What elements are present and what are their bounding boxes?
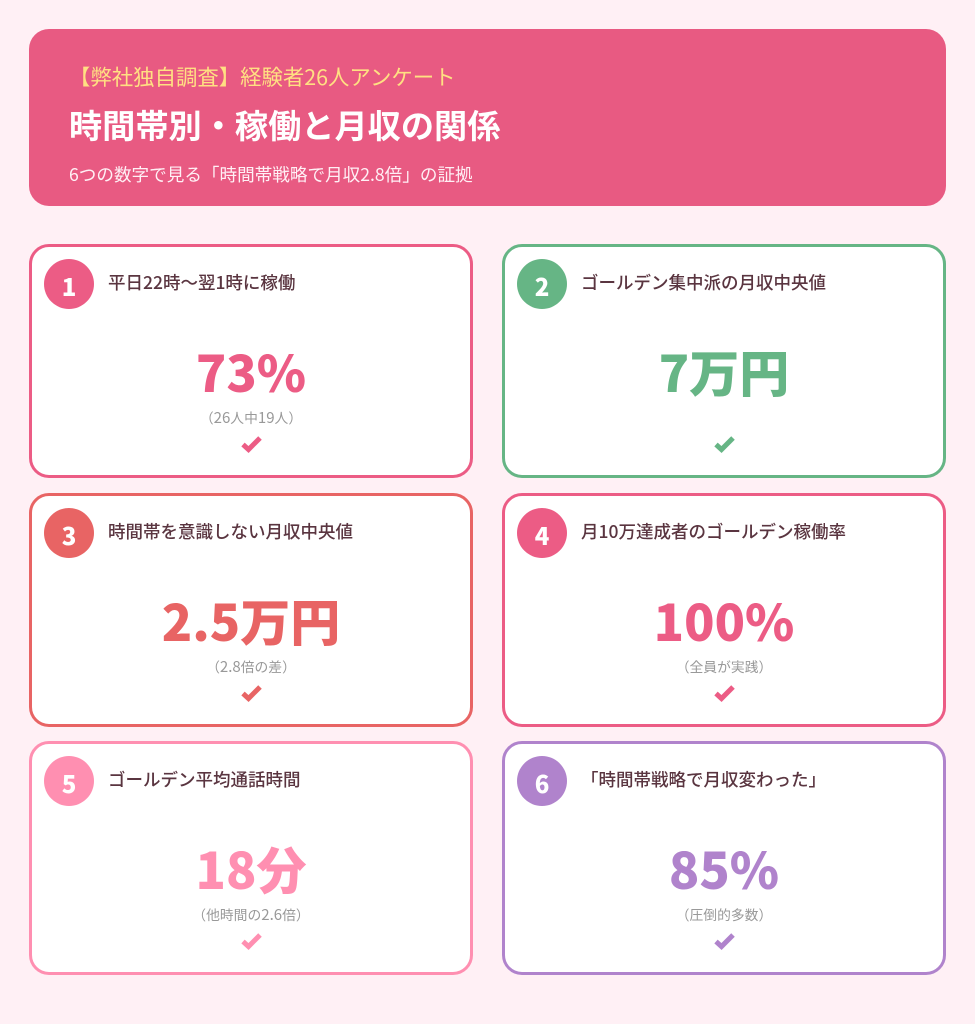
card 1 note: （26人中19人） [200,407,302,428]
card 2 value: 7万円 [659,335,789,407]
card 4 heading: 月10万達成者のゴールデン稼働率 [581,519,846,544]
main title: 時間帯別・稼働と月収の関係 [69,99,500,148]
icon: check 4 [714,685,735,702]
number badge 1 [44,259,94,309]
icon: check 6 [714,933,735,950]
panel: card 2 [502,244,946,478]
number badge 4 [517,508,567,558]
card 6 note: （圧倒的多数） [676,904,772,924]
icon: check 5 [241,933,262,950]
card 4 note: （全員が実践） [676,656,772,676]
number badge 2 [517,259,567,309]
number badge 4: 4 [535,517,549,552]
panel: card 3 [29,493,473,727]
panel: card 6 [502,741,946,975]
card 3 note: （2.8倍の差） [206,656,296,677]
card 5 heading: ゴールデン平均通話時間 [108,767,300,792]
card 5 note: （他時間の2.6倍） [192,904,310,925]
number badge 2: 2 [535,268,549,303]
card 4 value: 100% [654,584,794,656]
header subtitle: 6つの数字で見る「時間帯戦略で月収2.8倍」の証拠 [69,162,473,187]
number badge 5: 5 [62,765,76,800]
card 6 value: 85% [669,832,779,904]
card 6 heading: 「時間帯戦略で月収変わった」 [581,767,826,792]
card 3 heading: 時間帯を意識しない月収中央値 [108,519,353,544]
card 2 heading: ゴールデン集中派の月収中央値 [581,270,826,295]
icon: check 2 [714,436,735,453]
header eyebrow: 【弊社独自調査】経験者26人アンケート [69,61,456,92]
icon: check 1 [241,436,262,453]
number badge 6: 6 [535,765,549,800]
number badge 3 [44,508,94,558]
panel: card 5 [29,741,473,975]
card 5 value: 18分 [196,832,306,904]
card 1 heading: 平日22時～翌1時に稼働 [108,270,295,295]
number badge 6 [517,756,567,806]
panel: card 4 [502,493,946,727]
number badge 5 [44,756,94,806]
panel: card 1 [29,244,473,478]
number badge 3: 3 [62,517,76,552]
card 1 value: 73% [196,335,306,407]
icon: check 3 [241,685,262,702]
number badge 1: 1 [62,268,76,303]
card 3 value: 2.5万円 [162,584,340,656]
header banner [29,29,946,206]
